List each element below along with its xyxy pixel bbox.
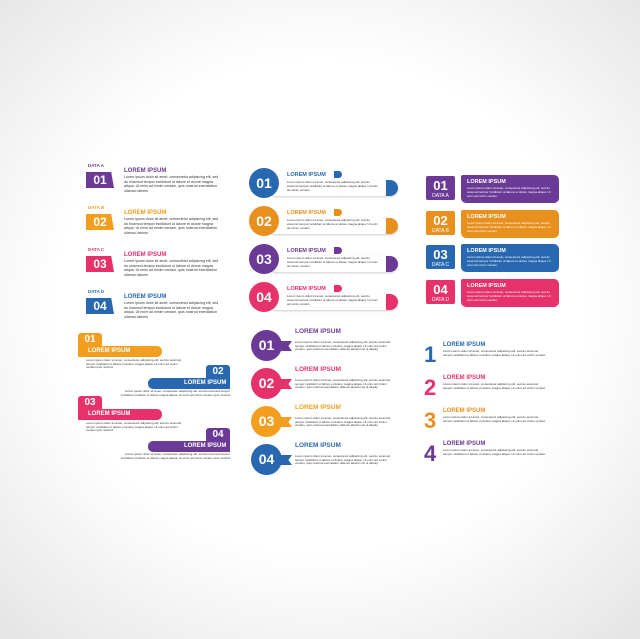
ribbon 04: LOREM IPSUM — [295, 442, 341, 449]
panel: tab banners: Lorem ipsum dolor sit amet, consectetur adipiscing elit, sed do eiusmod tempor incididunt ut labore et dolore magna aliqua. Ut enim ad minim veniam quis nostrud — [121, 452, 230, 460]
numeral 2: 2 — [424, 375, 436, 400]
panel: colored boxes — [426, 175, 559, 307]
banner 01: Lorem ipsum dolor sit amet, consectetur adipiscing elit, sed do eiusmod tempor incididunt ut labore et dolore magna aliqua. Ut enim ad minim veniam quis nostrud — [86, 358, 181, 369]
ribbon 02 — [251, 366, 390, 399]
numeral 4: 4 — [424, 441, 436, 466]
box 03: 03 — [433, 247, 448, 262]
numeral 2: Lorem ipsum dolor sit amet, consectetur adipiscing elit, sed do eiusmod tempor incididunt ut labore et dolore magna aliqua. Ut enim ad minim veniam. — [443, 382, 546, 390]
banner 04: LOREM IPSUM — [184, 443, 226, 449]
box 02: 02 — [433, 213, 448, 228]
numeral 4: Lorem ipsum dolor sit amet, consectetur adipiscing elit, sed do eiusmod tempor incididunt ut labore et dolore magna aliqua. Ut enim ad minim veniam. — [443, 448, 546, 456]
ribbon 02: Lorem ipsum dolor sit amet, consectetur adipiscing elit, sed do eiusmod tempor incididunt ut labore et dolore magna aliqua. Ut enim ad minim veniam, quis nostrud exercitation ullamco laboris nisi ut aliquip — [295, 378, 390, 389]
item 03: DATA C — [88, 247, 104, 252]
banner 04 — [148, 428, 230, 452]
ribbon 03: 03 — [259, 413, 274, 429]
panel: tab banners — [78, 333, 230, 460]
numeral 2: LOREM IPSUM — [443, 375, 485, 381]
item 02 — [86, 205, 218, 235]
numeral 1: 1 — [424, 342, 436, 367]
box 03 — [426, 244, 559, 272]
box 03: DATA C — [432, 262, 449, 268]
ribbon 01: Lorem ipsum dolor sit amet, consectetur adipiscing elit, sed do eiusmod tempor incididunt ut labore et dolore magna aliqua. Ut enim ad minim veniam, quis nostrud exercitation ullamco laboris nisi ut aliquip — [295, 340, 390, 351]
item 04: Lorem ipsum dolor sit amet, consectetur adipiscing elit, sed do eiusmod tempor incididunt ut labore et dolore magna aliqua. Ut enim ad minim veniam, quis nostrud exercitation ullamco laboris — [124, 301, 218, 319]
box 04: 04 — [433, 282, 448, 297]
ribbon 01: 01 — [259, 337, 274, 353]
item 01: 01 — [93, 173, 107, 187]
box 01: LOREM IPSUM — [467, 179, 506, 185]
pill 01: 01 — [256, 175, 272, 191]
pill 02: 02 — [256, 213, 272, 229]
item 02: LOREM IPSUM — [124, 210, 166, 216]
pill 04: LOREM IPSUM — [287, 286, 326, 292]
pill 03: LOREM IPSUM — [287, 248, 326, 254]
box 03: Lorem ipsum dolor sit amet, consectetur adipiscing elit, sed do eiusmod tempor incididunt ut labore et dolore magna aliqua. Ut enim ad minim veniam. — [467, 255, 551, 267]
box 01: Lorem ipsum dolor sit amet, consectetur adipiscing elit, sed do eiusmod tempor incididunt ut labore et dolore magna aliqua. Ut enim ad minim veniam. — [467, 186, 551, 198]
item 03: LOREM IPSUM — [124, 252, 166, 258]
panel: data list A-D — [86, 163, 218, 319]
ribbon 03: Lorem ipsum dolor sit amet, consectetur adipiscing elit, sed do eiusmod tempor incididunt ut labore et dolore magna aliqua. Ut enim ad minim veniam, quis nostrud exercitation ullamco laboris nisi ut aliquip — [295, 416, 390, 427]
ribbon 04 — [251, 442, 390, 475]
box 04 — [426, 279, 559, 307]
item 04: 04 — [93, 299, 107, 313]
box 04: Lorem ipsum dolor sit amet, consectetur adipiscing elit, sed do eiusmod tempor incididunt ut labore et dolore magna aliqua. Ut enim ad minim veniam. — [467, 290, 551, 302]
item 02: 02 — [93, 215, 107, 229]
banner 02: 02 — [212, 366, 224, 377]
ribbon 04: Lorem ipsum dolor sit amet, consectetur adipiscing elit, sed do eiusmod tempor incididunt ut labore et dolore magna aliqua. Ut enim ad minim veniam, quis nostrud exercitation ullamco laboris nisi ut aliquip — [295, 454, 390, 465]
item 01: DATA A — [88, 163, 104, 168]
box 01: 01 — [433, 178, 448, 193]
banner 03: 03 — [84, 397, 96, 408]
numeral 3 — [424, 408, 546, 433]
banner 02: LOREM IPSUM — [184, 380, 226, 386]
ribbon 01 — [251, 328, 390, 361]
banner 03: Lorem ipsum dolor sit amet, consectetur adipiscing elit, sed do eiusmod tempor incididunt ut labore et dolore magna aliqua. Ut enim ad minim veniam quis nostrud — [86, 421, 181, 432]
item 04: DATA D — [88, 289, 104, 294]
numeral 4: LOREM IPSUM — [443, 441, 485, 447]
pill 03: Lorem ipsum dolor sit amet, consectetur adipiscing elit, sed do eiusmod tempor incididunt ut labore et dolore magna aliqua. Ut enim ad minim veniam — [287, 256, 378, 268]
item 04: LOREM IPSUM — [124, 294, 166, 300]
item 01 — [86, 163, 218, 193]
numeral 1: Lorem ipsum dolor sit amet, consectetur adipiscing elit, sed do eiusmod tempor incididunt ut labore et dolore magna aliqua. Ut enim ad minim veniam. — [443, 349, 546, 357]
box 04: DATA D — [432, 297, 449, 303]
box 02: LOREM IPSUM — [467, 214, 506, 220]
box 02: DATA B — [432, 228, 449, 234]
box 02 — [426, 210, 559, 238]
banner 02 — [148, 365, 230, 389]
numeral 1 — [424, 342, 546, 367]
banner 03 — [78, 396, 181, 432]
item 02: DATA B — [88, 205, 104, 210]
pill 01: Lorem ipsum dolor sit amet, consectetur adipiscing elit, sed do eiusmod tempor incididunt ut labore et dolore magna aliqua. Ut enim ad minim veniam — [287, 180, 378, 192]
item 03 — [86, 247, 218, 277]
pill 02: LOREM IPSUM — [287, 210, 326, 216]
pill 04: Lorem ipsum dolor sit amet, consectetur adipiscing elit, sed do eiusmod tempor incididunt ut labore et dolore magna aliqua. Ut enim ad minim veniam — [287, 294, 378, 306]
numeral 3: 3 — [424, 408, 436, 433]
panel: circle pills — [249, 168, 399, 312]
pill 04: 04 — [256, 289, 272, 305]
ribbon 02: LOREM IPSUM — [295, 366, 341, 373]
item 01: Lorem ipsum dolor sit amet, consectetur adipiscing elit, sed do eiusmod tempor incididunt ut labore et dolore magna aliqua. Ut enim ad minim veniam, quis nostrud exercitation ullamco laboris — [124, 175, 218, 193]
item 04 — [86, 289, 218, 319]
panel: big numerals — [424, 342, 546, 466]
pill 01: LOREM IPSUM — [287, 172, 326, 178]
box 04: LOREM IPSUM — [467, 283, 506, 289]
ribbon 03 — [251, 404, 390, 437]
numeral 3: LOREM IPSUM — [443, 408, 485, 414]
box 01 — [426, 175, 559, 203]
item 03: Lorem ipsum dolor sit amet, consectetur adipiscing elit, sed do eiusmod tempor incididunt ut labore et dolore magna aliqua. Ut enim ad minim veniam, quis nostrud exercitation ullamco laboris — [124, 259, 218, 277]
numeral 1: LOREM IPSUM — [443, 342, 485, 348]
ribbon 02: 02 — [259, 375, 274, 391]
item 03: 03 — [93, 257, 107, 271]
banner 01 — [78, 333, 181, 369]
ribbon 03: LOREM IPSUM — [295, 404, 341, 411]
pill 03 — [249, 244, 399, 274]
banner 01: 01 — [84, 334, 96, 345]
box 03: LOREM IPSUM — [467, 248, 506, 254]
item 01: LOREM IPSUM — [124, 168, 166, 174]
pill 02 — [249, 206, 399, 236]
item 02: Lorem ipsum dolor sit amet, consectetur adipiscing elit, sed do eiusmod tempor incididunt ut labore et dolore magna aliqua. Ut enim ad minim veniam, quis nostrud exercitation ullamco laboris — [124, 217, 218, 235]
panel: circle ribbons — [251, 328, 390, 475]
panel: tab banners: Lorem ipsum dolor sit amet, consectetur adipiscing elit, sed do eiusmod tempor incididunt ut labore et dolore magna aliqua. Ut enim ad minim veniam quis nostrud — [121, 389, 230, 397]
pill 04 — [249, 282, 399, 312]
numeral 4 — [424, 440, 546, 466]
banner 03: LOREM IPSUM — [88, 411, 130, 417]
banner 04: 04 — [212, 429, 224, 440]
numeral 2 — [424, 374, 546, 400]
pill 02: Lorem ipsum dolor sit amet, consectetur adipiscing elit, sed do eiusmod tempor incididunt ut labore et dolore magna aliqua. Ut enim ad minim veniam — [287, 218, 378, 230]
pill 03: 03 — [256, 251, 272, 267]
box 01: DATA A — [432, 193, 449, 199]
box 02: Lorem ipsum dolor sit amet, consectetur adipiscing elit, sed do eiusmod tempor incididunt ut labore et dolore magna aliqua. Ut enim ad minim veniam. — [467, 221, 551, 233]
ribbon 04: 04 — [259, 451, 274, 467]
ribbon 01: LOREM IPSUM — [295, 328, 341, 335]
pill 01 — [249, 168, 399, 198]
banner 01: LOREM IPSUM — [88, 348, 130, 354]
numeral 3: Lorem ipsum dolor sit amet, consectetur adipiscing elit, sed do eiusmod tempor incididunt ut labore et dolore magna aliqua. Ut enim ad minim veniam. — [443, 415, 546, 423]
